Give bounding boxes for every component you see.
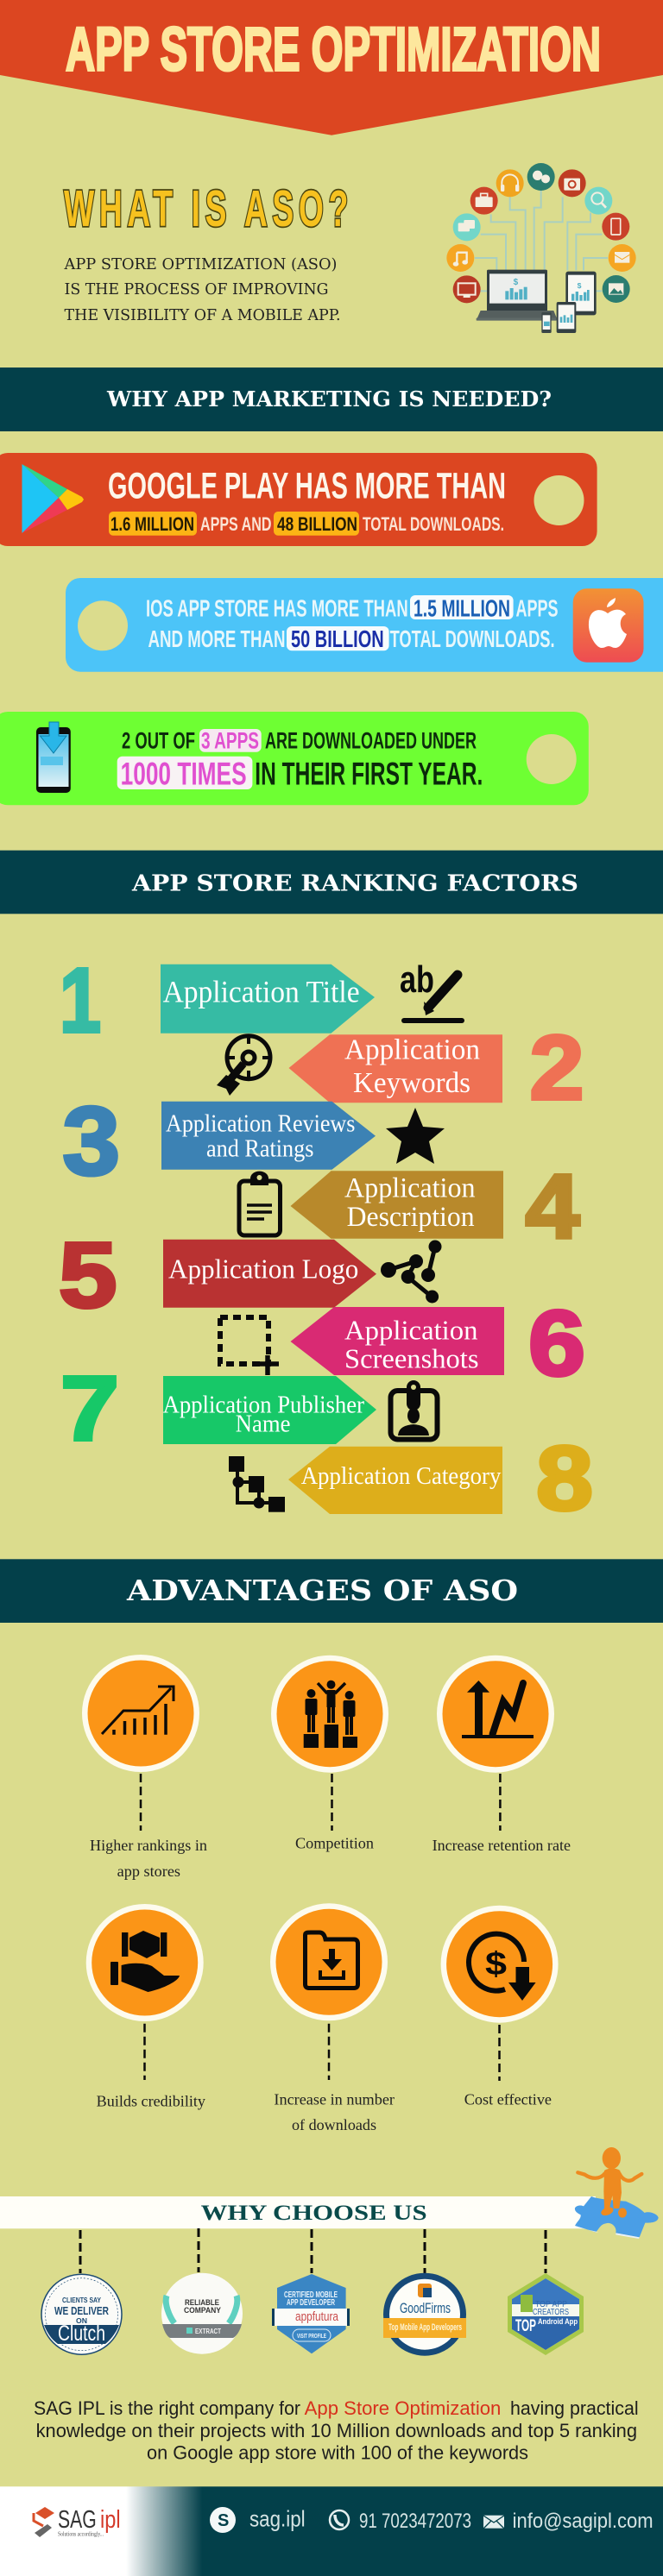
- text block: sag ipl pitch: [34, 2397, 639, 2464]
- section band: why choose us: WHY CHOOSE US: [201, 2202, 427, 2225]
- section band: advantages: ADVANTAGES OF ASO: [126, 1574, 518, 1607]
- icon: handshake: [110, 1931, 180, 1992]
- advantage: cost effective: Cost effective: [464, 2090, 552, 2108]
- text: ios stats: 1.5 MILLION: [414, 595, 510, 621]
- icon: dollar down: $: [485, 1946, 507, 1982]
- panel: downloads under 1000: [0, 712, 589, 805]
- laptop: $: [514, 278, 519, 287]
- text: downloads stat: [117, 728, 483, 791]
- icon: hierarchy: [229, 1456, 285, 1512]
- factor 8: application category: [229, 1428, 593, 1530]
- text block: sag ipl pitch: on Google app store with 100 of the keywords: [147, 2442, 528, 2464]
- text block: aso definition: [64, 255, 340, 324]
- badge: top app creators: Android App: [538, 2317, 578, 2327]
- section band: ranking factors: APP STORE RANKING FACTORS: [131, 871, 578, 897]
- advantage: downloads: of downloads: [292, 2116, 376, 2133]
- text: downloads stat: 1000 TIMES: [121, 756, 247, 791]
- badge: appfutura: appfutura: [295, 2309, 339, 2324]
- text: ios stats: IOS APP STORE HAS MORE THAN: [146, 595, 408, 621]
- icon: star: [386, 1108, 445, 1164]
- badge: appfutura: VISIT PROFILE: [297, 2332, 326, 2340]
- icon: folder download: [306, 1932, 357, 1988]
- stats line: google play: 48 BILLION: [277, 513, 357, 535]
- contact: phone: 91 7023472073: [359, 2510, 471, 2533]
- header banner: [0, 0, 663, 135]
- badge: top app creators: TOP APP: [535, 2300, 567, 2309]
- heading: what is aso: WHAT IS ASO?: [64, 180, 353, 237]
- factor 3: reviews and ratings: [62, 1087, 445, 1195]
- factor 2: application keywords: Keywords: [353, 1067, 470, 1099]
- connector lines to badges: [80, 2228, 546, 2273]
- stats line: google play: [109, 512, 504, 536]
- text block: aso definition: APP STORE OPTIMIZATION (ASO): [64, 255, 337, 273]
- panel: google play: [0, 453, 597, 546]
- badge: clutch: CLIENTS SAY: [62, 2296, 101, 2304]
- advantage: higher rankings: Higher rankings in: [90, 1837, 207, 1854]
- badge: appfutura: APP DEVELOPER: [287, 2298, 336, 2308]
- badge: extract: EXTRACT: [195, 2328, 221, 2335]
- factor 7: publisher name: Name: [236, 1411, 290, 1437]
- badge: extract: [161, 2273, 243, 2354]
- icon: rising chart: [102, 1687, 174, 1735]
- factor 4: application description: Application: [344, 1172, 476, 1203]
- logo: sag ipl: SAG: [58, 2506, 97, 2534]
- factor 8: application category: 8: [536, 1428, 593, 1530]
- factor 1: application title: Application Title: [163, 975, 360, 1009]
- icon: podium: [304, 1681, 357, 1748]
- factor 2: application keywords: Application: [344, 1034, 480, 1065]
- icon: phone download: [36, 722, 71, 793]
- factor 3: reviews and ratings: Application Reviews: [166, 1111, 355, 1138]
- badge: clutch: Clutch: [58, 2322, 105, 2346]
- factor 4: application description: Description: [347, 1202, 475, 1233]
- logo: sag ipl: ipl: [100, 2506, 121, 2534]
- factor 7: publisher name: Application Publisher: [163, 1392, 365, 1418]
- badge: goodfirms: [383, 2273, 466, 2356]
- text: downloads stat: ARE DOWNLOADED UNDER: [265, 728, 477, 754]
- icon: clipboard: [239, 1172, 280, 1235]
- section band: ranking factors: [0, 851, 663, 914]
- factor 8: application category: Application Category: [301, 1462, 502, 1490]
- section band: advantages: [0, 1559, 663, 1623]
- factor 7: publisher name: 7: [60, 1358, 119, 1460]
- icon: google play: [22, 464, 84, 533]
- badge: clutch: ON: [76, 2317, 87, 2325]
- text block: sag ipl pitch: SAG IPL is the right company for: [34, 2397, 300, 2419]
- factor 7: publisher name: [60, 1358, 437, 1460]
- badge: clutch: WE DELIVER: [54, 2304, 109, 2317]
- factor 5: application logo: [59, 1222, 442, 1327]
- panel: ios app store: [66, 578, 663, 672]
- advantage: credibility: [86, 1904, 205, 2110]
- tablet: [565, 272, 597, 315]
- factor 4: application description: [239, 1156, 580, 1258]
- icon: network: [381, 1241, 442, 1303]
- section band: why app marketing: [0, 368, 663, 431]
- advantage: credibility: Builds credibility: [97, 2093, 205, 2110]
- text: ios stats: TOTAL DOWNLOADS.: [390, 625, 555, 652]
- advantage: higher rankings: app stores: [117, 1863, 180, 1880]
- text block: aso definition: IS THE PROCESS OF IMPROVING: [64, 280, 328, 298]
- factor 2: application keywords: 2: [530, 1017, 584, 1119]
- stats line: google play: APPS AND: [200, 513, 271, 535]
- footer: [0, 2486, 663, 2576]
- text: ios stats: [146, 595, 558, 652]
- illustration: man on puzzle piece: [575, 2147, 659, 2239]
- icon: id badge: [390, 1380, 437, 1439]
- text: ios stats: APPS: [516, 595, 558, 621]
- badge: top app creators: [508, 2273, 584, 2355]
- icon: dollar down: [469, 1934, 536, 2001]
- factor 5: application logo: Application Logo: [168, 1253, 358, 1285]
- icon: ab pen: [400, 958, 464, 1023]
- advantage: competition: Competition: [295, 1835, 374, 1852]
- contact: skype: sag.ipl: [249, 2505, 306, 2531]
- section band: why choose us: [0, 2196, 596, 2228]
- badge: appfutura: CERTIFIED MOBILE: [284, 2290, 338, 2300]
- factor 6: application screenshots: [220, 1291, 585, 1395]
- icon: ab pen: ab: [400, 958, 434, 1001]
- illustration: devices with app icons: [446, 163, 636, 333]
- stats line: google play: 1.6 MILLION: [110, 513, 194, 535]
- text block: aso definition: THE VISIBILITY OF A MOBILE APP.: [64, 306, 340, 324]
- factor 1: application title: [60, 950, 464, 1052]
- factor 6: application screenshots: Screenshots: [344, 1343, 478, 1374]
- badge: extract: COMPANY: [184, 2306, 222, 2315]
- badge: goodfirms: GoodFirms: [400, 2300, 451, 2316]
- laptop: [477, 270, 557, 321]
- section band: why app marketing: WHY APP MARKETING IS NEEDED?: [106, 386, 552, 412]
- badge: top app creators: CREATORS: [533, 2308, 569, 2317]
- badge: goodfirms: Top Mobile App Developers: [388, 2322, 462, 2333]
- factor 6: application screenshots: Application: [344, 1315, 478, 1346]
- icon: arrow and zigzag: [462, 1681, 534, 1738]
- advantage: downloads: Increase in number: [274, 2090, 395, 2108]
- text: downloads stat: IN THEIR FIRST YEAR.: [255, 756, 483, 791]
- stats line: google play: TOTAL DOWNLOADS.: [363, 513, 504, 535]
- badge: clutch: [41, 2274, 122, 2354]
- advantage: retention: Increase retention rate: [433, 1837, 571, 1854]
- contact: email: info@sagipl.com: [513, 2510, 654, 2533]
- logo: sag ipl: Solutions accordingly...: [58, 2530, 104, 2537]
- tablet: $: [578, 281, 582, 290]
- factor 6: application screenshots: 6: [528, 1291, 585, 1395]
- text block: sag ipl pitch: knowledge on their projects with 10 Million downloads and top 5 ranking: [36, 2420, 637, 2441]
- badge: extract: RELIABLE: [185, 2298, 219, 2308]
- text block: sag ipl pitch: App Store Optimization: [305, 2397, 501, 2419]
- factor 3: reviews and ratings: 3: [62, 1087, 120, 1195]
- text: ios stats: AND MORE THAN: [148, 625, 285, 652]
- phone: [541, 302, 576, 333]
- contact: phone: [330, 2510, 471, 2533]
- icon: apple tile: [573, 588, 644, 663]
- contact: skype: [210, 2505, 306, 2533]
- advantage: downloads: [270, 1903, 395, 2133]
- text block: sag ipl pitch: having practical: [510, 2397, 639, 2419]
- badge: top app creators: TOP: [515, 2317, 536, 2335]
- advantage: retention: [433, 1656, 571, 1854]
- advantage: cost effective: [441, 1906, 559, 2108]
- contact: skype: S: [218, 2511, 229, 2530]
- icon: screenshot frame: [220, 1317, 279, 1375]
- logo: sag ipl: [34, 2506, 121, 2537]
- badge: appfutura: [272, 2274, 350, 2353]
- text: downloads stat: 2 OUT OF: [122, 728, 195, 754]
- text: downloads stat: 3 APPS: [201, 728, 259, 754]
- advantage: competition: [271, 1656, 388, 1852]
- factor 3: reviews and ratings: and Ratings: [206, 1136, 313, 1163]
- factor 1: application title: 1: [60, 950, 101, 1052]
- icon: key target: [217, 1034, 271, 1096]
- advantage: higher rankings: [82, 1655, 207, 1880]
- factor 5: application logo: 5: [59, 1222, 117, 1327]
- text: ios stats: 50 BILLION: [291, 625, 384, 652]
- factor 2: application keywords: [217, 1017, 584, 1119]
- factor 4: application description: 4: [525, 1156, 580, 1258]
